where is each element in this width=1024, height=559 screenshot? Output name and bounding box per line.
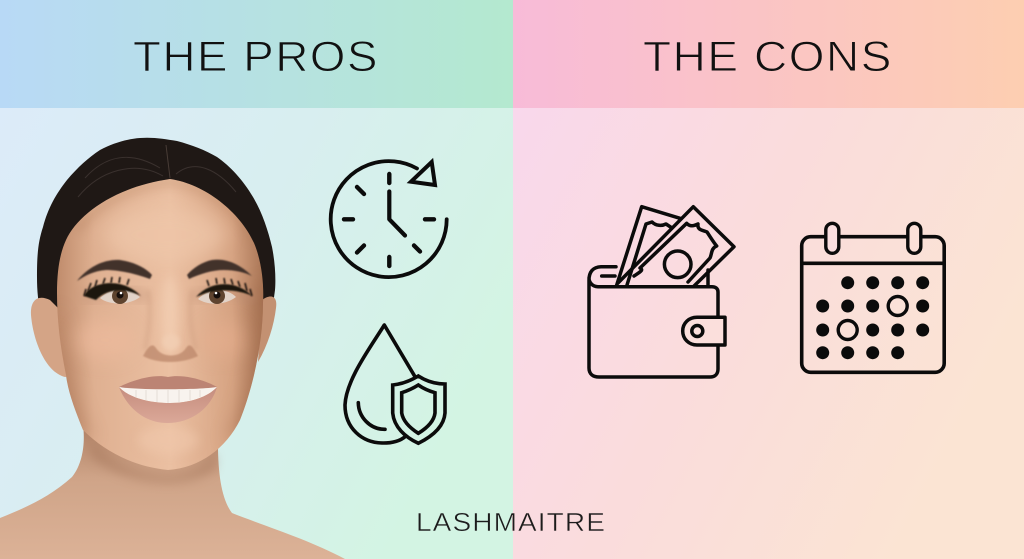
icon: clock with circular arrow [331,161,447,277]
left eye [84,277,141,304]
heading: the pros: THE PROS [133,33,379,81]
left ear [31,298,72,377]
eyebrow right [187,260,252,279]
panel: pros background [0,108,513,559]
icon: wallet with banknotes [589,207,734,377]
neck and shoulders [0,425,345,559]
mouth [119,376,217,423]
portrait of smiling woman [0,138,345,559]
panel: cons background [513,108,1024,559]
icon: water drop with shield [345,325,445,443]
face shading [62,179,264,448]
header band: cons [513,0,1024,108]
brand name: LASHMAITRE [416,507,606,537]
header band: pros [0,0,513,108]
neck shadow [90,440,216,483]
right eye [196,278,252,304]
icon: calendar [802,223,944,372]
eyebrow left [77,260,152,281]
right ear [258,296,276,362]
hair highlights [78,145,236,197]
nose [143,345,198,362]
face [57,179,263,470]
heading: the cons: THE CONS [643,33,893,81]
hair [37,138,275,322]
